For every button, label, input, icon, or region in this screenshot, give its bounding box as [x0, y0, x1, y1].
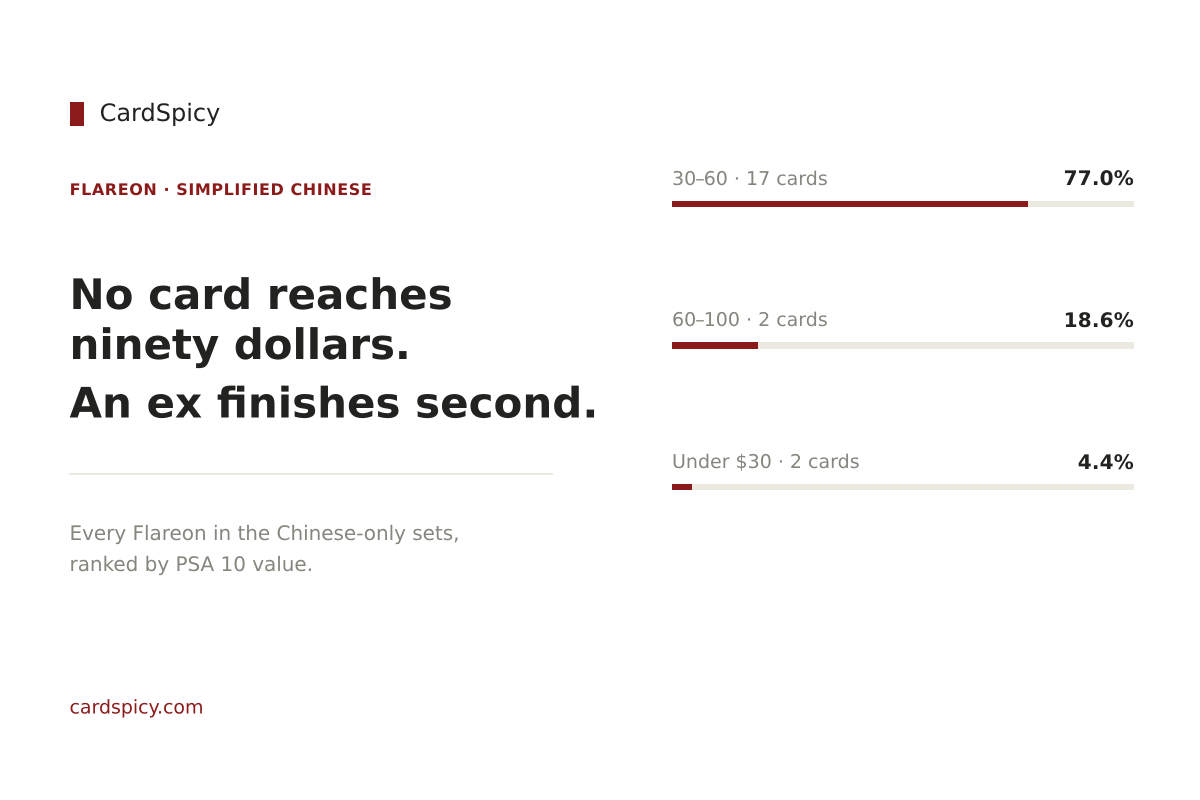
bar row: 30–60: [672, 166, 1134, 207]
title line 1: No card reaches: [70, 270, 453, 319]
icon: logo mark: [70, 102, 84, 126]
description: Every Flareon in the Chinese-only sets,: [70, 521, 459, 545]
row label: Under $30 · 2 cards: [672, 451, 860, 473]
row label: 30–60 · 17 cards: [672, 168, 828, 190]
row value: 4.4%: [1078, 450, 1134, 474]
logo: [70, 99, 220, 127]
description: ranked by PSA 10 value.: [70, 552, 313, 576]
row value: 18.6%: [1064, 308, 1134, 332]
bar row: 60–100: [672, 308, 1134, 349]
bar: [672, 484, 1134, 490]
footer url: cardspicy.com: [70, 696, 203, 718]
bar row: under $30: [672, 450, 1134, 490]
title: [70, 270, 598, 428]
description: [70, 521, 459, 576]
title line 2: ninety dollars.: [70, 320, 411, 369]
row label: 60–100 · 2 cards: [672, 309, 828, 331]
bar: [672, 201, 1134, 207]
bar: [672, 342, 1134, 349]
title line 3: An ex finishes second.: [70, 378, 598, 428]
brand name: CardSpicy: [100, 99, 220, 127]
eyebrow: FLAREON · SIMPLIFIED CHINESE: [70, 180, 372, 199]
row value: 77.0%: [1064, 166, 1134, 190]
